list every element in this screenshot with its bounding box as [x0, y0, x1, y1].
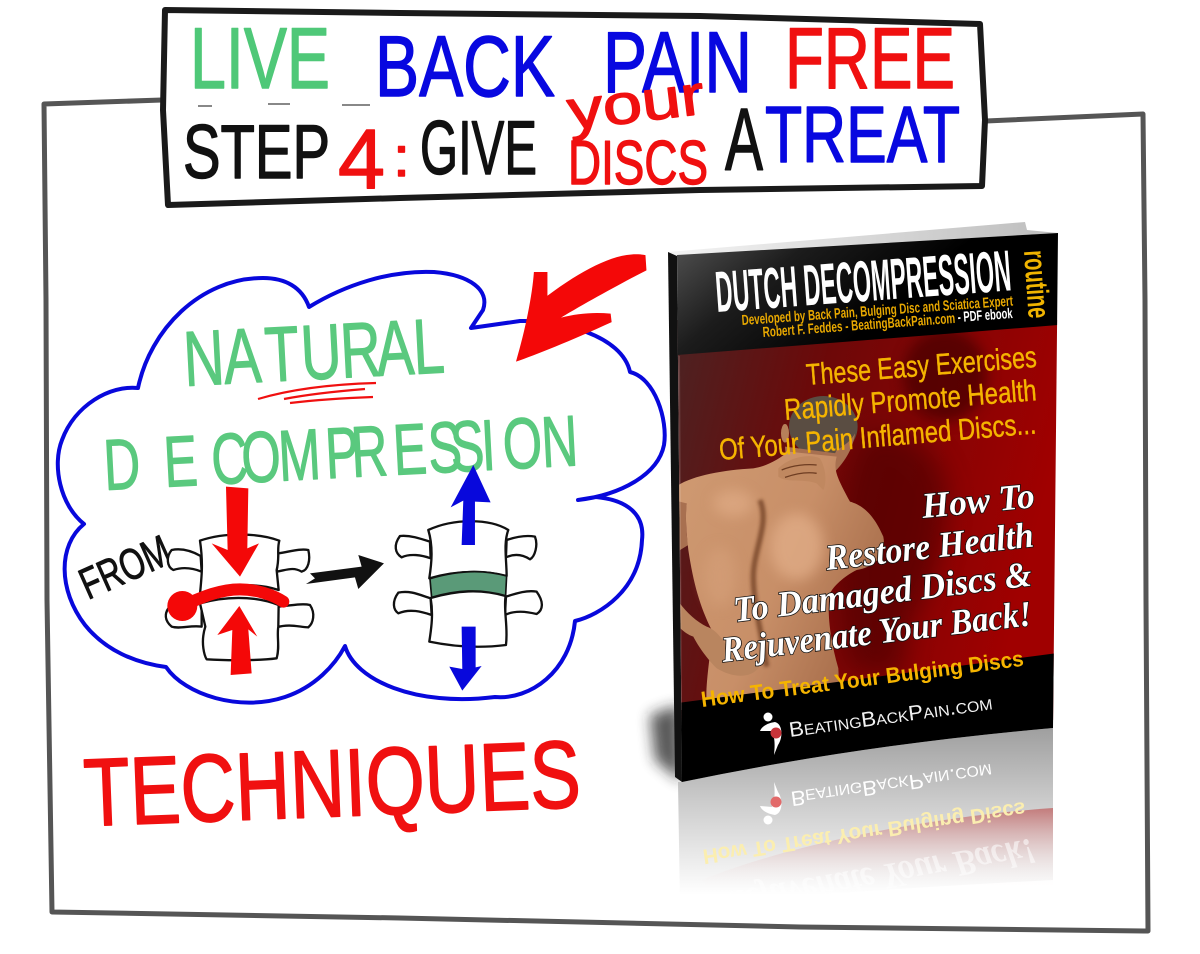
torso: [673, 452, 884, 702]
heading: techniques: TECHNIQUES: [82, 721, 582, 847]
left edge highlight: [678, 356, 682, 710]
page edge: [668, 222, 1058, 256]
bulging disc: [182, 589, 283, 606]
cover headline: Rapidly Promote Health: [783, 374, 1038, 427]
label: from: FROM: [72, 526, 178, 609]
cover subtitle: - PDF ebook: [957, 306, 1014, 326]
title line 2: A: [725, 90, 763, 189]
red panel: [670, 320, 1065, 720]
reflection: How To Treat Your Bulging Discs: [701, 797, 1027, 868]
black transition arrow: [306, 555, 384, 589]
man photo: [672, 396, 884, 702]
title line 1: FREE: [785, 11, 955, 107]
title line 2: TREAT: [765, 90, 960, 179]
reflection: [678, 728, 1053, 925]
compression arrow down: [212, 487, 259, 577]
decompression arrow up: [451, 465, 491, 545]
brand name: BeatingBackPain.com: [788, 691, 994, 742]
diagram: decompressed spine: [394, 465, 542, 691]
decompression arrow down: [449, 627, 482, 691]
diagram: compressed spine: [166, 487, 313, 675]
cover headline: [718, 341, 1038, 467]
ebook cover: [650, 222, 1065, 925]
cover headline: Of Your Pain Inflamed Discs...: [718, 407, 1037, 467]
heading: decompression: DECOMPRESSION: [102, 402, 580, 506]
cover serif message: How To: [919, 475, 1036, 526]
thought cloud: [58, 272, 665, 703]
title line 1: BACK: [375, 19, 555, 115]
title box: [163, 10, 985, 206]
cover tag: routine: routine: [1017, 249, 1057, 319]
cover headline: These Easy Exercises: [805, 341, 1038, 392]
big red arrow: [516, 254, 646, 362]
upper arm: [679, 490, 688, 550]
forearm and hand: [680, 604, 759, 676]
cover serif message: Rejuvenate Your Back!: [718, 593, 1034, 670]
title line 1: [190, 11, 955, 115]
cover subtitle: Developed by Back Pain, Bulging Disc and Sciatica Expert: [741, 294, 1014, 329]
title line 2: DISCS: [568, 129, 708, 198]
cover yellow strap: How To Treat Your Bulging Discs: [699, 646, 1025, 712]
cover serif message: To Damaged Discs &: [731, 554, 1034, 630]
title line 2: [183, 63, 960, 206]
book drop shadow: [650, 705, 682, 782]
cover serif message: Restore Health: [822, 515, 1036, 578]
hand on neck: [778, 456, 823, 482]
title line 2: GIVE: [420, 106, 537, 191]
title line 1: PAIN: [603, 15, 752, 111]
title line 1: LIVE: [190, 11, 330, 107]
cover subtitle: [741, 294, 1014, 341]
cover serif message: [718, 475, 1036, 670]
cover subtitle: Robert F. Feddes - BeatingBackPain.com: [762, 311, 956, 341]
title line 2: 4: [338, 112, 385, 206]
reflection: BeatingBackPain.com: [789, 759, 994, 810]
top black band: [677, 233, 1058, 355]
faint dashes: [198, 104, 370, 106]
healthy disc: [430, 572, 507, 597]
back shadow: [753, 500, 767, 667]
heading: natural: NATURAL: [181, 302, 446, 403]
bottom black band: [681, 654, 1054, 782]
head: [789, 396, 858, 457]
red underline: [258, 383, 376, 403]
ghost figure: [838, 329, 987, 680]
title line 2: :: [393, 125, 410, 188]
spine: [668, 252, 682, 782]
muscle highlights: [770, 513, 823, 580]
brand logo: [760, 712, 782, 755]
reflection: Rejuvenate Your Back!: [721, 829, 1039, 925]
title line 2: your: [564, 63, 707, 142]
compression arrow up: [217, 606, 257, 675]
title line 2: STEP: [183, 110, 330, 195]
